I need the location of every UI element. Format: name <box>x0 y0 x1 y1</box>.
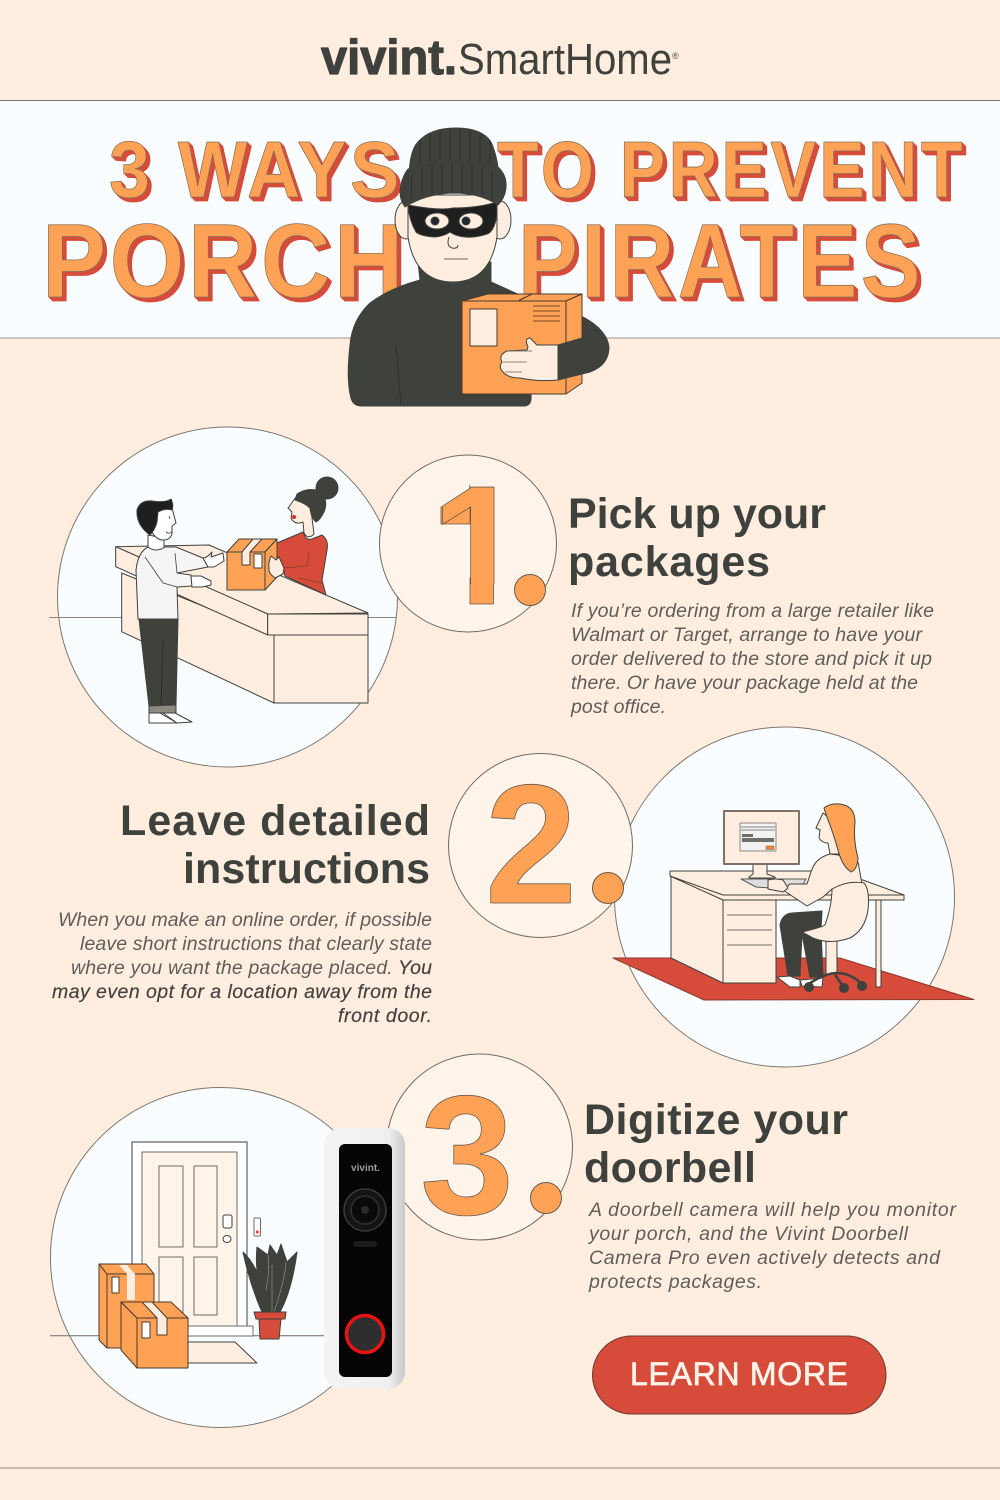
circle background <box>50 1088 390 1428</box>
step 1 heading: packages <box>568 538 770 586</box>
panel: step 2 number <box>448 750 632 940</box>
step 3 text: A doorbell camera will help you monitor <box>588 1199 958 1221</box>
step 3 text: protects packages. <box>588 1271 762 1293</box>
logo: vivint SmartHome <box>321 31 679 85</box>
step 2 heading <box>120 797 430 893</box>
title: 3 WAYS <box>109 125 403 214</box>
door <box>130 1142 260 1336</box>
step 2 text <box>52 909 432 1027</box>
package <box>462 294 582 394</box>
step 3 heading: Digitize your <box>584 1096 848 1144</box>
office chair <box>802 882 868 992</box>
step 1 heading <box>568 490 826 586</box>
man hands <box>203 552 224 567</box>
step 3 heading: doorbell <box>584 1144 756 1192</box>
person: woman <box>277 477 338 595</box>
icon: thief holding package <box>348 128 609 406</box>
step 2 text: where you want the package placed. You <box>71 957 432 979</box>
circle background <box>58 427 398 767</box>
logo: vivint SmartHome: ® <box>672 51 679 61</box>
brand label: vivint. <box>351 1163 380 1174</box>
panel: step 3 number <box>386 1054 572 1251</box>
man hair <box>137 499 173 535</box>
panel: step 1 illustration <box>49 427 398 767</box>
title: PORCH <box>42 203 407 320</box>
monitor <box>724 811 806 890</box>
step 1 text: post office. <box>570 696 666 718</box>
step 1 heading: Pick up your <box>568 490 826 538</box>
panel: step 1 number: 1 <box>431 451 526 641</box>
thief mask <box>408 202 497 237</box>
person: man <box>136 499 224 723</box>
rug <box>613 958 974 1000</box>
doorbell camera <box>324 1128 405 1389</box>
person: woman at desk <box>768 804 862 987</box>
step 2 text: front door. <box>338 1005 432 1027</box>
step 2 text: leave short instructions that clearly state <box>80 933 432 955</box>
step 1 text <box>570 600 934 718</box>
thief hand <box>500 338 558 381</box>
thief arm <box>558 317 609 380</box>
thief beanie <box>400 128 506 207</box>
step 2 text: may even opt for a location away from the <box>52 981 432 1003</box>
man neck and face <box>148 535 164 551</box>
title <box>42 125 966 320</box>
desk <box>670 871 904 987</box>
button: learn more: LEARN MORE <box>630 1356 848 1392</box>
logo: vivint SmartHome: vivint. <box>321 31 457 85</box>
step 3 text: your porch, and the Vivint Doorbell <box>587 1223 909 1245</box>
lens <box>344 1189 386 1231</box>
panel: step 3 illustration <box>50 1088 390 1428</box>
panel: step 2 number: 2 <box>485 750 577 940</box>
button: learn more <box>592 1336 886 1414</box>
title: PIRATES <box>518 203 924 320</box>
package <box>227 539 284 590</box>
step 1 text: there. Or have your package held at the <box>571 672 918 694</box>
man sweater <box>136 547 208 619</box>
step 2 heading: Leave detailed <box>120 797 430 845</box>
step 2 heading: instructions <box>183 845 430 893</box>
step 3 text: Camera Pro even actively detects and <box>589 1247 941 1269</box>
step 1 text: order delivered to the store and pick it up <box>571 648 932 670</box>
plant <box>243 1244 297 1339</box>
panel: step 3 number: 3 <box>420 1061 514 1251</box>
sensor <box>353 1241 377 1247</box>
logo: vivint SmartHome: SmartHome <box>458 35 672 84</box>
packages <box>99 1264 188 1368</box>
thief body <box>348 262 531 406</box>
step 3 heading <box>584 1096 848 1192</box>
panel: step 2 illustration <box>613 727 974 1067</box>
thief ears <box>395 201 417 239</box>
button <box>346 1316 384 1352</box>
circle background <box>614 727 954 1067</box>
counter <box>116 545 368 703</box>
step 3 text <box>587 1199 958 1293</box>
step 2 text: When you make an online order, if possible <box>58 909 432 931</box>
woman hand <box>269 556 284 578</box>
step 1 text: If you’re ordering from a large retailer like <box>571 600 934 622</box>
thief face <box>408 195 497 282</box>
panel: step 1 number <box>380 451 556 641</box>
header band <box>0 100 1000 338</box>
step 1 text: Walmart or Target, arrange to have your <box>571 624 924 646</box>
doormat <box>188 1342 257 1363</box>
